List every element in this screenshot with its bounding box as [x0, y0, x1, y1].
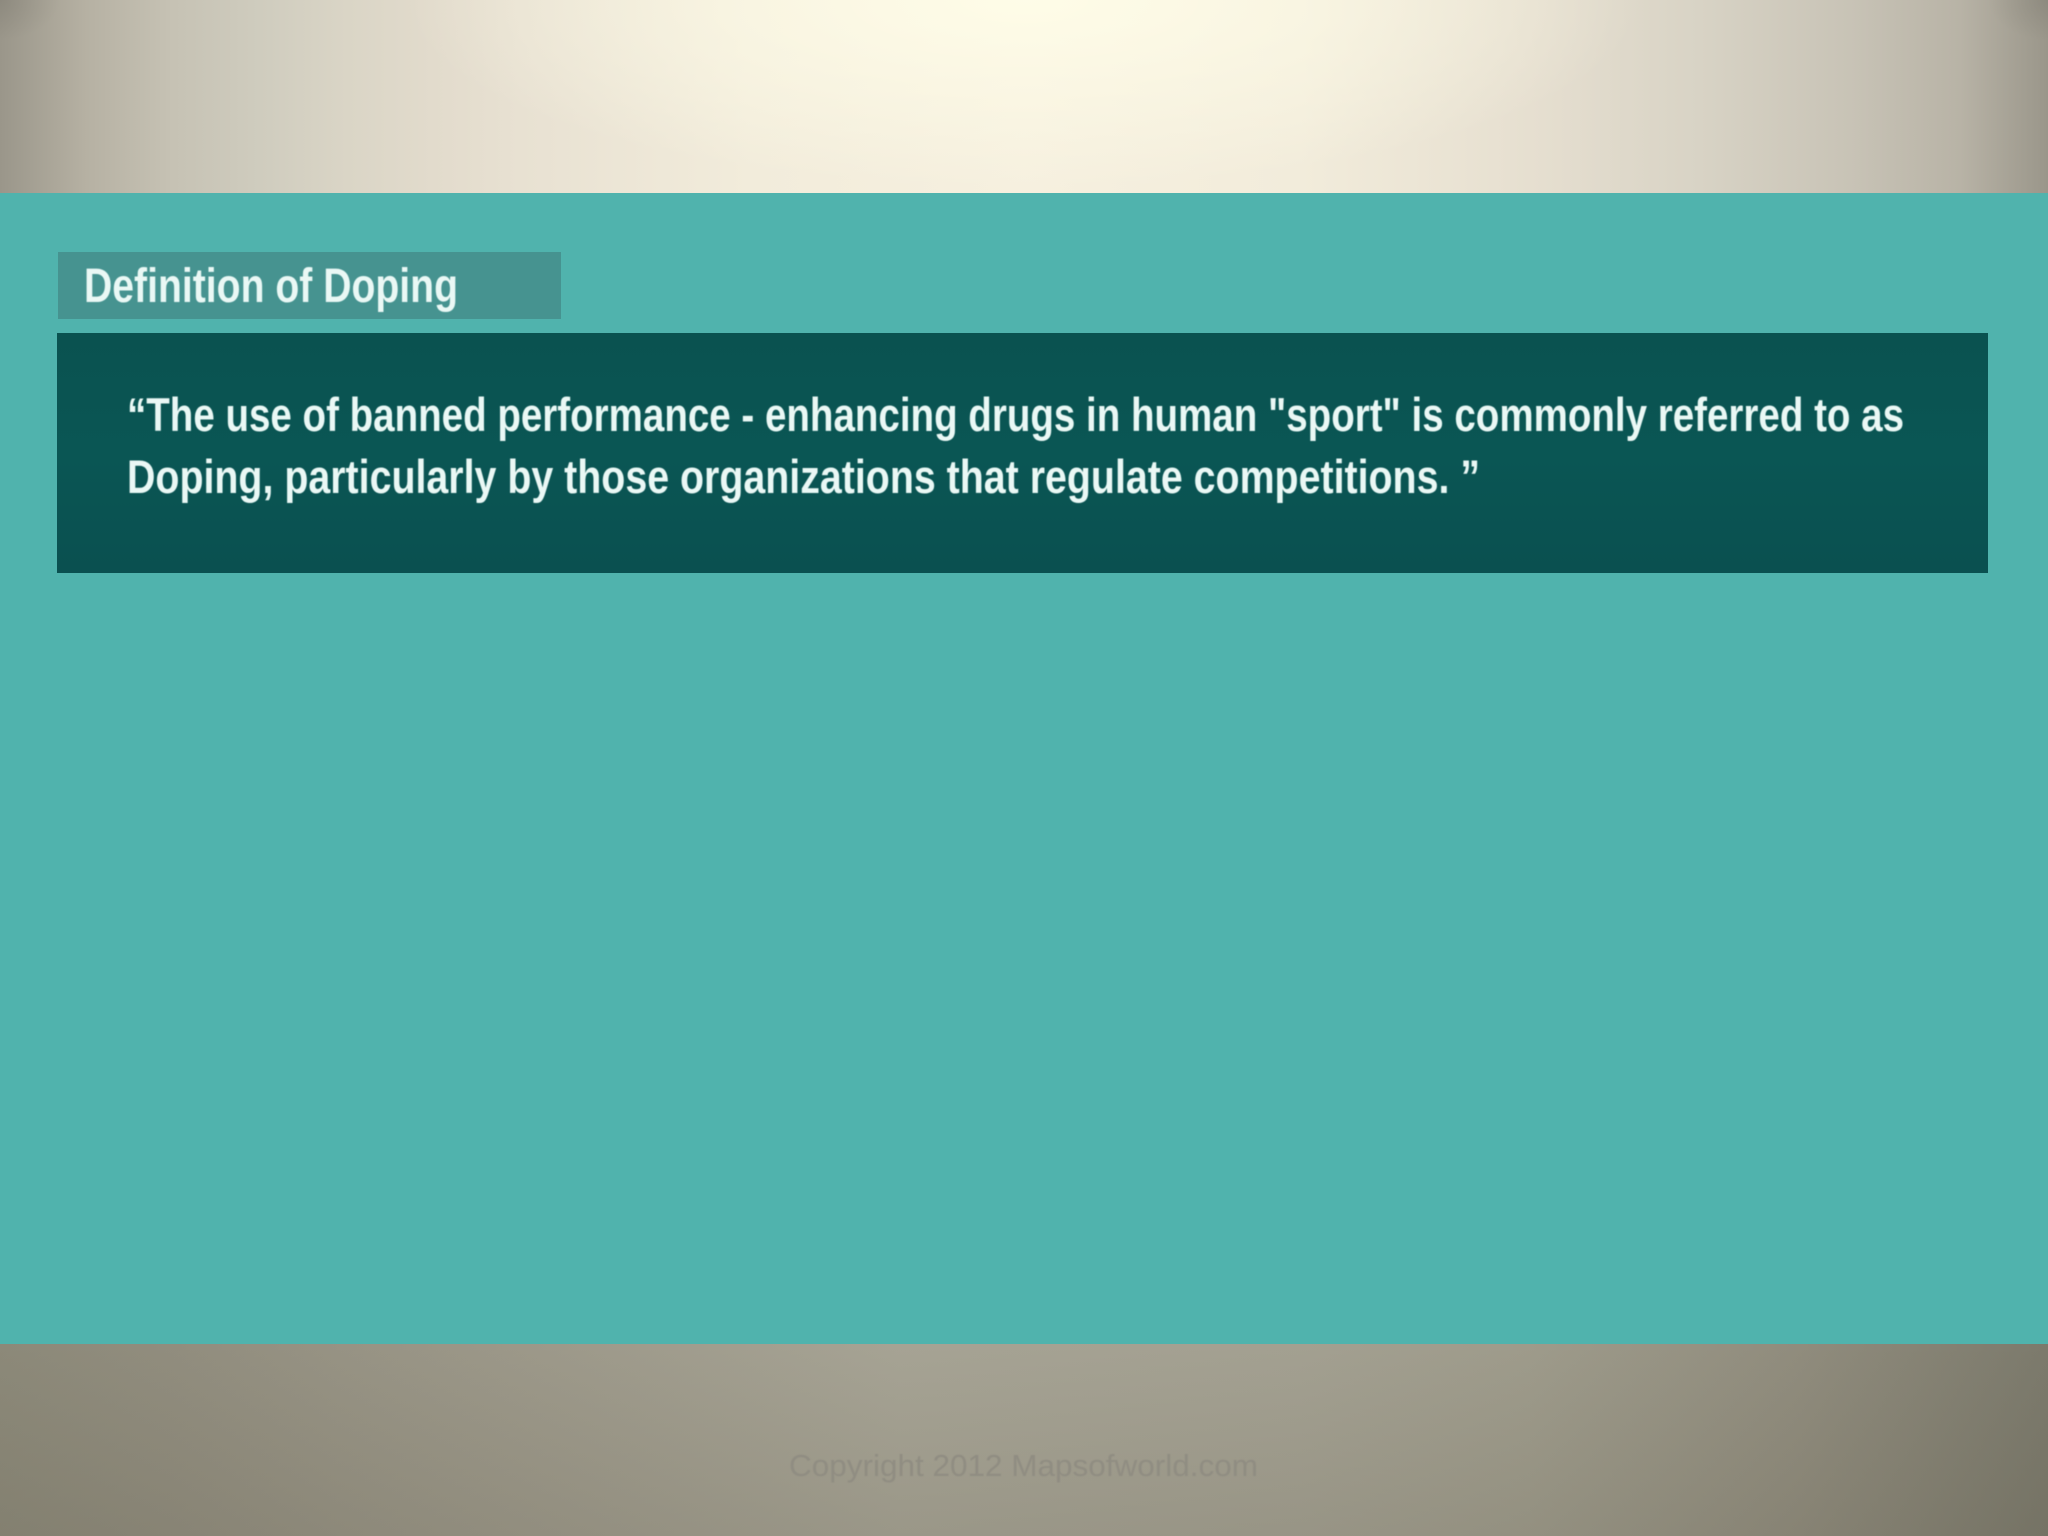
copyright notice: Copyright 2012 Mapsofworld.com: [789, 1448, 1258, 1483]
quote line 2: Doping, particularly by those organizations that regulate competitions. ”: [127, 450, 1480, 503]
definition quote panel: [57, 333, 1988, 573]
bottom gradient band: [0, 1344, 2048, 1536]
teal main panel: [0, 193, 2048, 1344]
heading: definition of doping: Definition of Doping: [84, 260, 458, 313]
top gradient band: [0, 0, 2048, 193]
